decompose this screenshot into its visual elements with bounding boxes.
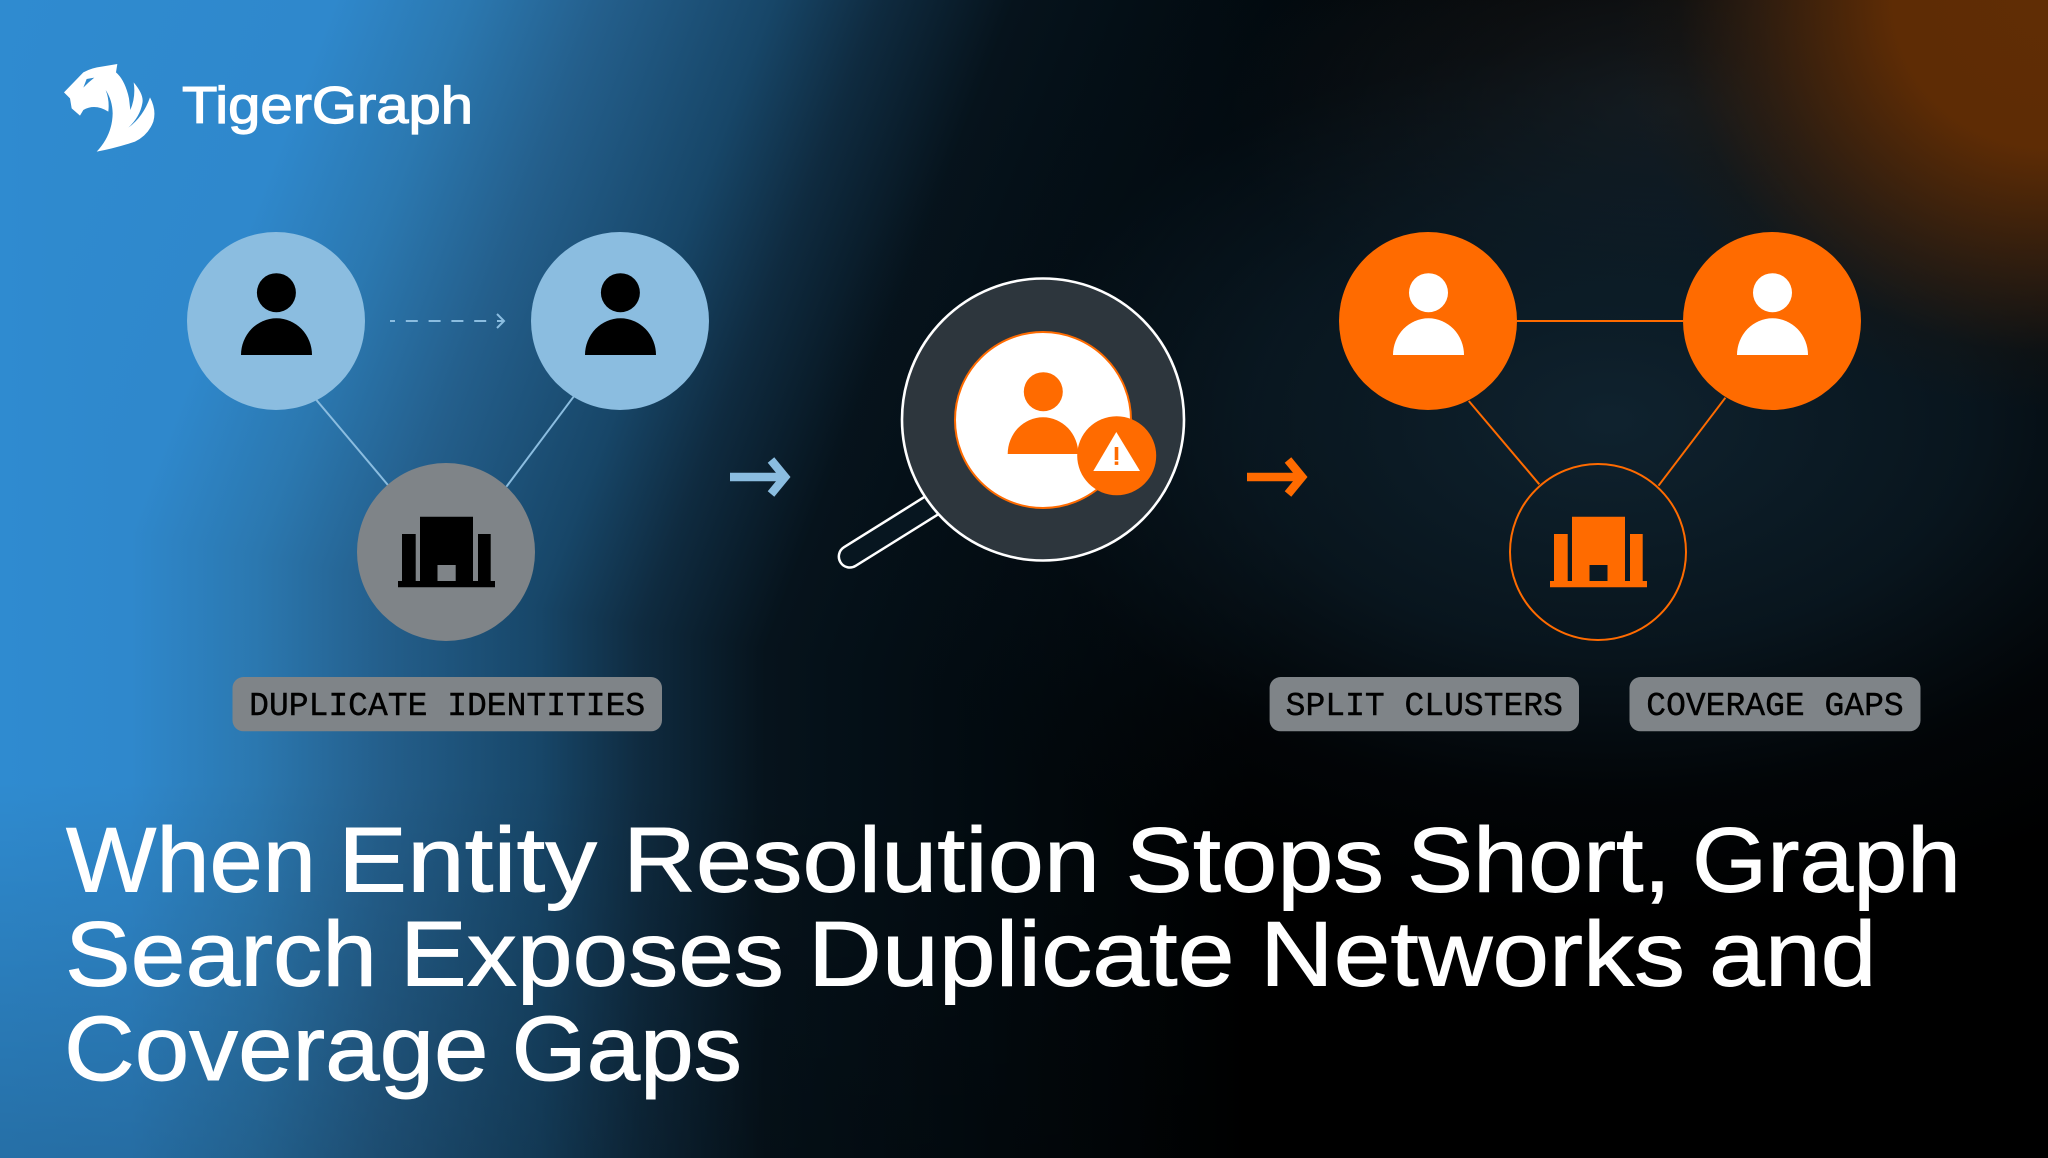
logo: TigerGraph xyxy=(64,64,473,152)
panel: duplicate identities graph xyxy=(187,232,709,731)
label: duplicate identities xyxy=(232,677,662,731)
title: When xyxy=(66,810,316,912)
node: organisation xyxy=(357,463,535,641)
person under inspection xyxy=(955,332,1131,508)
title: Search xyxy=(65,904,377,1006)
node: person right xyxy=(531,232,709,410)
node: person right xyxy=(1683,232,1861,410)
arrow: blue xyxy=(730,460,785,494)
node: person left xyxy=(1339,232,1517,410)
label: split clusters: SPLIT CLUSTERS xyxy=(1286,688,1563,725)
title: Short, xyxy=(1407,810,1671,912)
title: Coverage xyxy=(64,998,489,1100)
panel: resolved graph with gaps xyxy=(1270,232,1920,731)
dashed arrow between people xyxy=(390,314,504,328)
icon: tiger head xyxy=(64,64,154,152)
label: duplicate identities: DUPLICATE IDENTITIES xyxy=(249,688,645,725)
title: Stops xyxy=(1126,810,1384,912)
label: coverage gaps xyxy=(1630,677,1920,731)
arrow: orange xyxy=(1247,460,1302,494)
title: Entity xyxy=(338,810,597,912)
title: Resolution xyxy=(623,810,1100,912)
connector lines xyxy=(316,397,574,487)
magnifier xyxy=(835,278,1184,572)
connector lines xyxy=(1469,321,1725,486)
magnifier lens xyxy=(902,278,1184,560)
node: organisation outline xyxy=(1510,464,1686,640)
title xyxy=(64,810,1961,1100)
icon: warning badge xyxy=(1077,416,1156,495)
title: Graph xyxy=(1692,810,1961,912)
title: Gaps xyxy=(512,998,742,1100)
magnifier handle xyxy=(835,487,952,572)
node: person left xyxy=(187,232,365,410)
title: Networks xyxy=(1260,904,1685,1006)
label: coverage gaps: COVERAGE GAPS xyxy=(1646,688,1904,725)
title: and xyxy=(1709,904,1876,1006)
label: split clusters xyxy=(1270,677,1579,731)
title: Duplicate xyxy=(808,904,1234,1006)
logo wordmark: TigerGraph xyxy=(182,77,473,135)
title: Exposes xyxy=(400,904,784,1006)
